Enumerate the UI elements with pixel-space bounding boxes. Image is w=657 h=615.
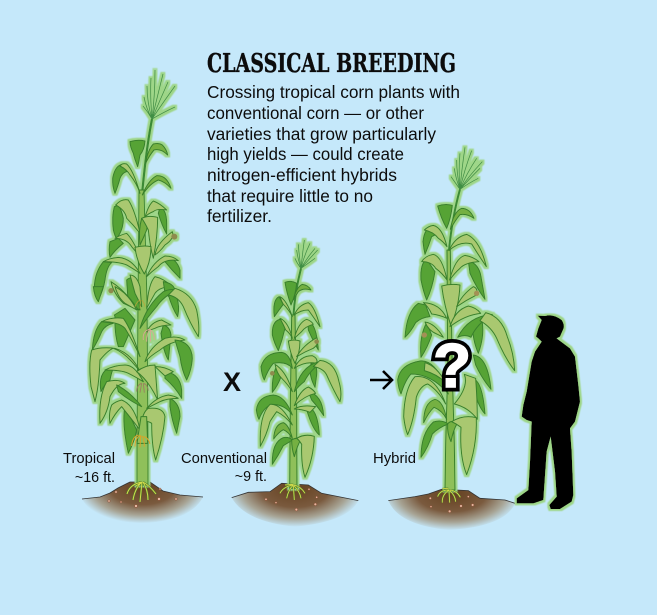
text block: description (207, 82, 460, 226)
stem (445, 250, 455, 490)
ear: pink silk (143, 329, 154, 342)
plant: conventional corn (256, 240, 341, 488)
roots: hybrid (438, 488, 460, 503)
leaves (438, 204, 452, 228)
question mark: ? (433, 332, 471, 401)
stem (290, 315, 297, 488)
label: conventional: Conventional (181, 450, 267, 467)
ear: orange silk (132, 435, 150, 447)
ear: top yellow (135, 300, 145, 308)
label: tropical: Tropical (63, 450, 115, 467)
ear (270, 371, 275, 376)
text block: description: Crossing tropical corn plants with (207, 82, 460, 102)
ear (474, 291, 479, 296)
label: tropical: ~16 ft. (75, 470, 115, 486)
text block: description: conventional corn — or other (207, 103, 424, 123)
label: hybrid: Hybrid (373, 450, 416, 467)
ear (314, 339, 319, 344)
tassel (449, 147, 482, 250)
tassel (142, 70, 175, 195)
ear (422, 332, 427, 338)
tassel (293, 240, 318, 317)
multiply sign: X (223, 367, 241, 397)
label: tropical (63, 450, 115, 486)
person silhouette (517, 315, 580, 509)
roots: tropical (127, 482, 156, 502)
ear: upper right (171, 234, 177, 240)
question mark: ? (433, 332, 471, 401)
soil: tropical (82, 482, 203, 523)
stem (137, 190, 148, 485)
roots: conventional (280, 484, 305, 500)
upper leaves (94, 140, 180, 310)
text block: description: high yields — could create (207, 144, 404, 164)
leaves (285, 281, 297, 305)
soil: hybrid (388, 489, 515, 530)
label: conventional: ~9 ft. (235, 469, 267, 485)
soil: conventional (232, 483, 358, 527)
title: CLASSICAL BREEDING (207, 49, 456, 79)
lower leaves (90, 287, 199, 460)
text block: description: fertilizer. (207, 206, 272, 226)
text block: description: varieties that grow particularly (207, 124, 436, 144)
text block: description: nitrogen-efficient hybrids (207, 165, 397, 185)
ear: left (108, 288, 114, 293)
ear: brown (137, 383, 148, 393)
label: conventional (181, 450, 267, 485)
text block: description: that require little to no (207, 186, 373, 206)
arrow (370, 371, 392, 389)
plant: tropical corn (90, 70, 199, 485)
plant: hybrid corn (398, 147, 515, 490)
